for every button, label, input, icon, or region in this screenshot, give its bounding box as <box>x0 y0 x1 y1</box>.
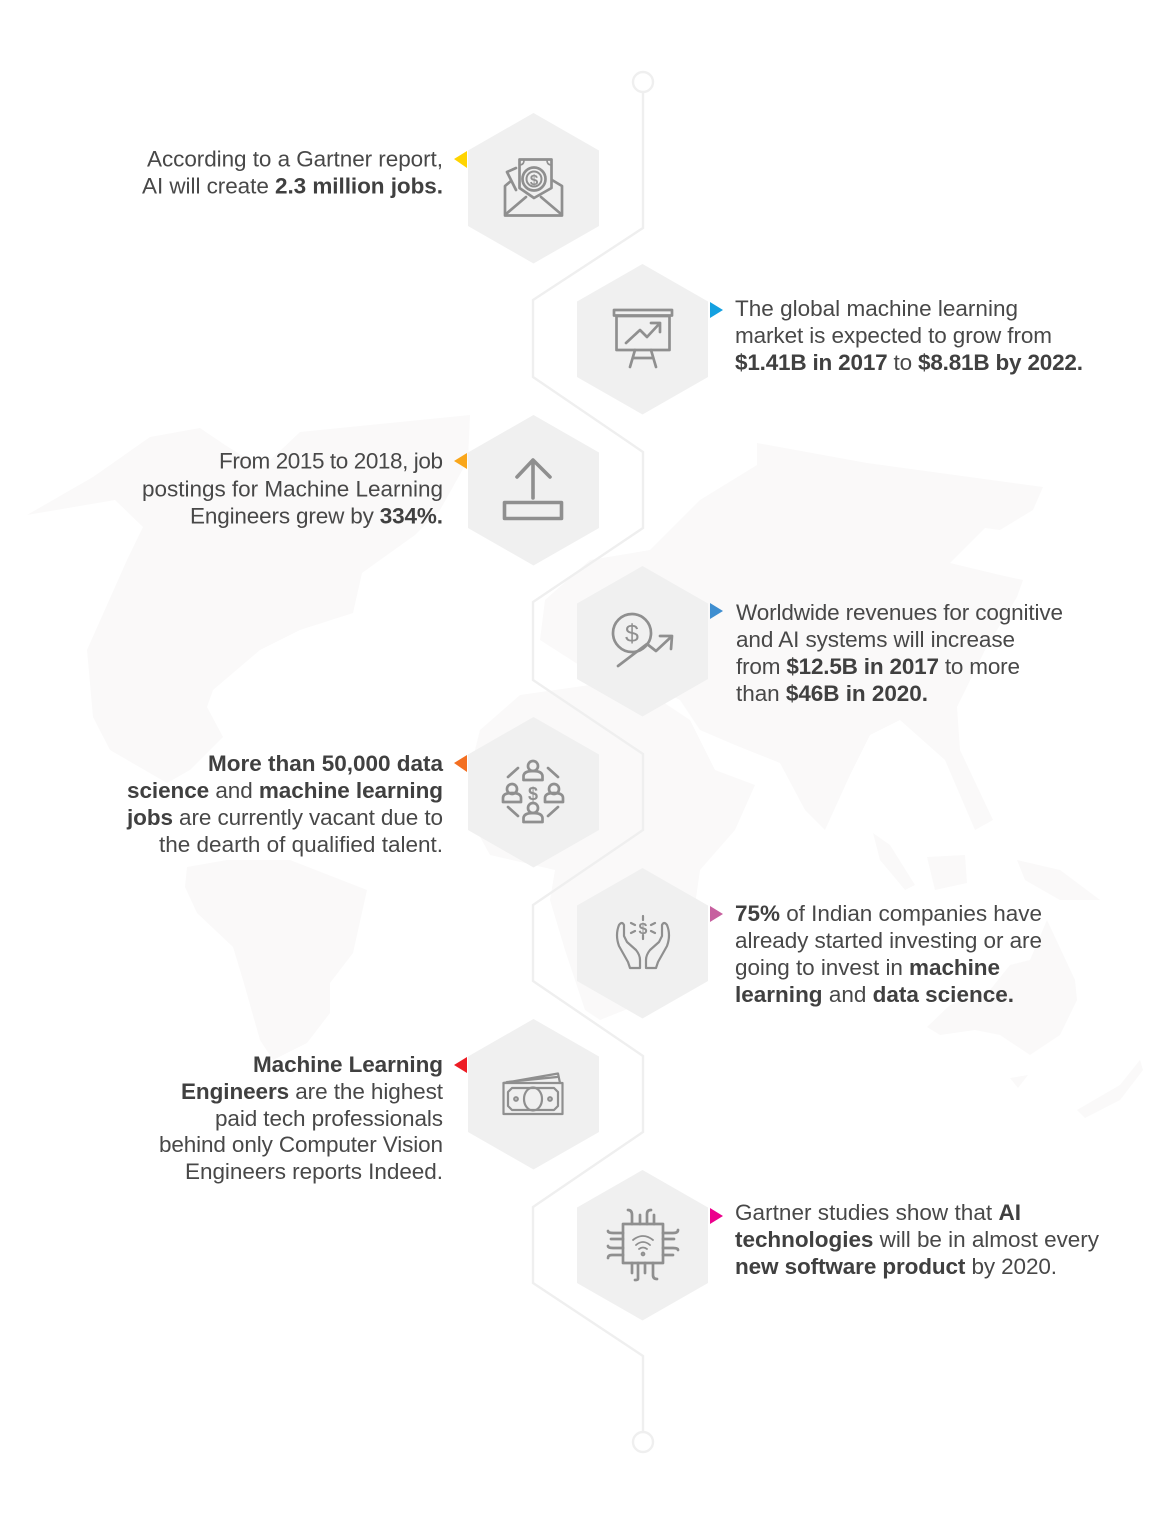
text: vacant jobs: More than 50,000 data <box>208 751 443 776</box>
arrow: orange <box>454 755 467 772</box>
hexagon 1 <box>468 113 599 264</box>
text: worldwide revenues <box>736 600 1063 706</box>
text: vacant jobs: jobs are currently vacant due to <box>126 805 443 830</box>
icon: envelope with money: $ <box>530 172 539 189</box>
text: Indian companies investing: learning and data science. <box>735 982 1014 1007</box>
arrow: red <box>454 1057 467 1073</box>
icon: stack of banknotes <box>504 1074 562 1114</box>
arrow: mauve <box>710 906 723 922</box>
hexagon 7 <box>468 1019 599 1170</box>
text: vacant jobs: the dearth of qualified talent. <box>159 832 443 857</box>
text: Gartner 2.3 million jobs <box>142 146 443 198</box>
icon: coin with growth arrow <box>613 614 672 666</box>
arrow: amber <box>454 453 467 469</box>
icon: people around a dollar sign <box>503 761 563 822</box>
text: AI technologies in software: technologies will be in almost every <box>735 1227 1100 1252</box>
text: highest paid engineers: Engineers are the highest <box>181 1079 444 1104</box>
text: global machine learning market: $1.41B in 2017 to $8.81B by 2022. <box>735 350 1083 375</box>
text: global machine learning market: The global machine learning <box>735 296 1018 321</box>
text: highest paid engineers: behind only Computer Vision <box>159 1132 443 1157</box>
world map background <box>27 415 1143 1118</box>
icon: people around a dollar sign: $ <box>528 784 538 804</box>
text: AI technologies in software: Gartner studies show that AI <box>735 1200 1021 1225</box>
text: Indian companies investing: 75% of Indian companies have <box>735 901 1042 926</box>
hexagon 6 <box>577 868 708 1018</box>
hexagon 8 <box>577 1170 708 1320</box>
text: highest paid engineers: paid tech professionals <box>215 1106 443 1131</box>
text: job postings growth: Engineers grew by 334%. <box>190 504 443 528</box>
hexagon 4 <box>577 566 708 716</box>
text: global machine learning market <box>735 296 1083 375</box>
text: worldwide revenues: and AI systems will increase <box>736 627 1015 652</box>
text: Indian companies investing: going to invest in machine <box>735 955 1000 980</box>
icon: hands holding money: $ <box>639 921 648 938</box>
text: job postings growth: From 2015 to 2018, job <box>219 448 443 474</box>
text: job postings growth: postings for Machine Learning <box>142 476 443 502</box>
text: vacant jobs <box>126 751 443 857</box>
text: Gartner 2.3 million jobs: AI will create 2.3 million jobs. <box>142 174 443 198</box>
text: Indian companies investing: already started investing or are <box>735 928 1042 953</box>
text: Indian companies investing <box>735 901 1042 1007</box>
text: vacant jobs: science and machine learning <box>127 778 443 803</box>
text: global machine learning market: market is expected to grow from <box>735 323 1052 348</box>
icon: presentation board with rising chart <box>614 310 672 367</box>
text: job postings growth <box>142 448 443 528</box>
arrow: magenta <box>710 1208 723 1224</box>
text: AI technologies in software <box>735 1200 1100 1279</box>
hexagon 5 <box>468 717 599 868</box>
text: Gartner 2.3 million jobs: According to a Gartner report, <box>147 146 443 172</box>
arrow: mid blue <box>710 603 723 619</box>
arrow: yellow <box>454 151 467 168</box>
text: worldwide revenues: than $46B in 2020. <box>736 681 928 706</box>
icon: wifi microchip <box>608 1210 678 1280</box>
text: AI technologies in software: new software product by 2020. <box>735 1254 1057 1279</box>
text: highest paid engineers: Engineers reports Indeed. <box>185 1159 443 1184</box>
text: highest paid engineers <box>159 1052 444 1184</box>
text: worldwide revenues: Worldwide revenues for cognitive <box>736 600 1063 625</box>
hexagon 2 <box>577 264 708 414</box>
timeline connector line <box>533 72 653 1452</box>
arrow: blue <box>710 302 723 318</box>
icon: coin with growth arrow: $ <box>625 620 639 648</box>
hexagon 3 <box>468 415 599 566</box>
text: highest paid engineers: Machine Learning <box>253 1052 443 1077</box>
text: worldwide revenues: from $12.5B in 2017 to more <box>736 654 1020 679</box>
icon: envelope with money <box>505 160 562 216</box>
icon: upload arrow <box>504 460 562 518</box>
icon: hands holding money <box>617 916 669 968</box>
